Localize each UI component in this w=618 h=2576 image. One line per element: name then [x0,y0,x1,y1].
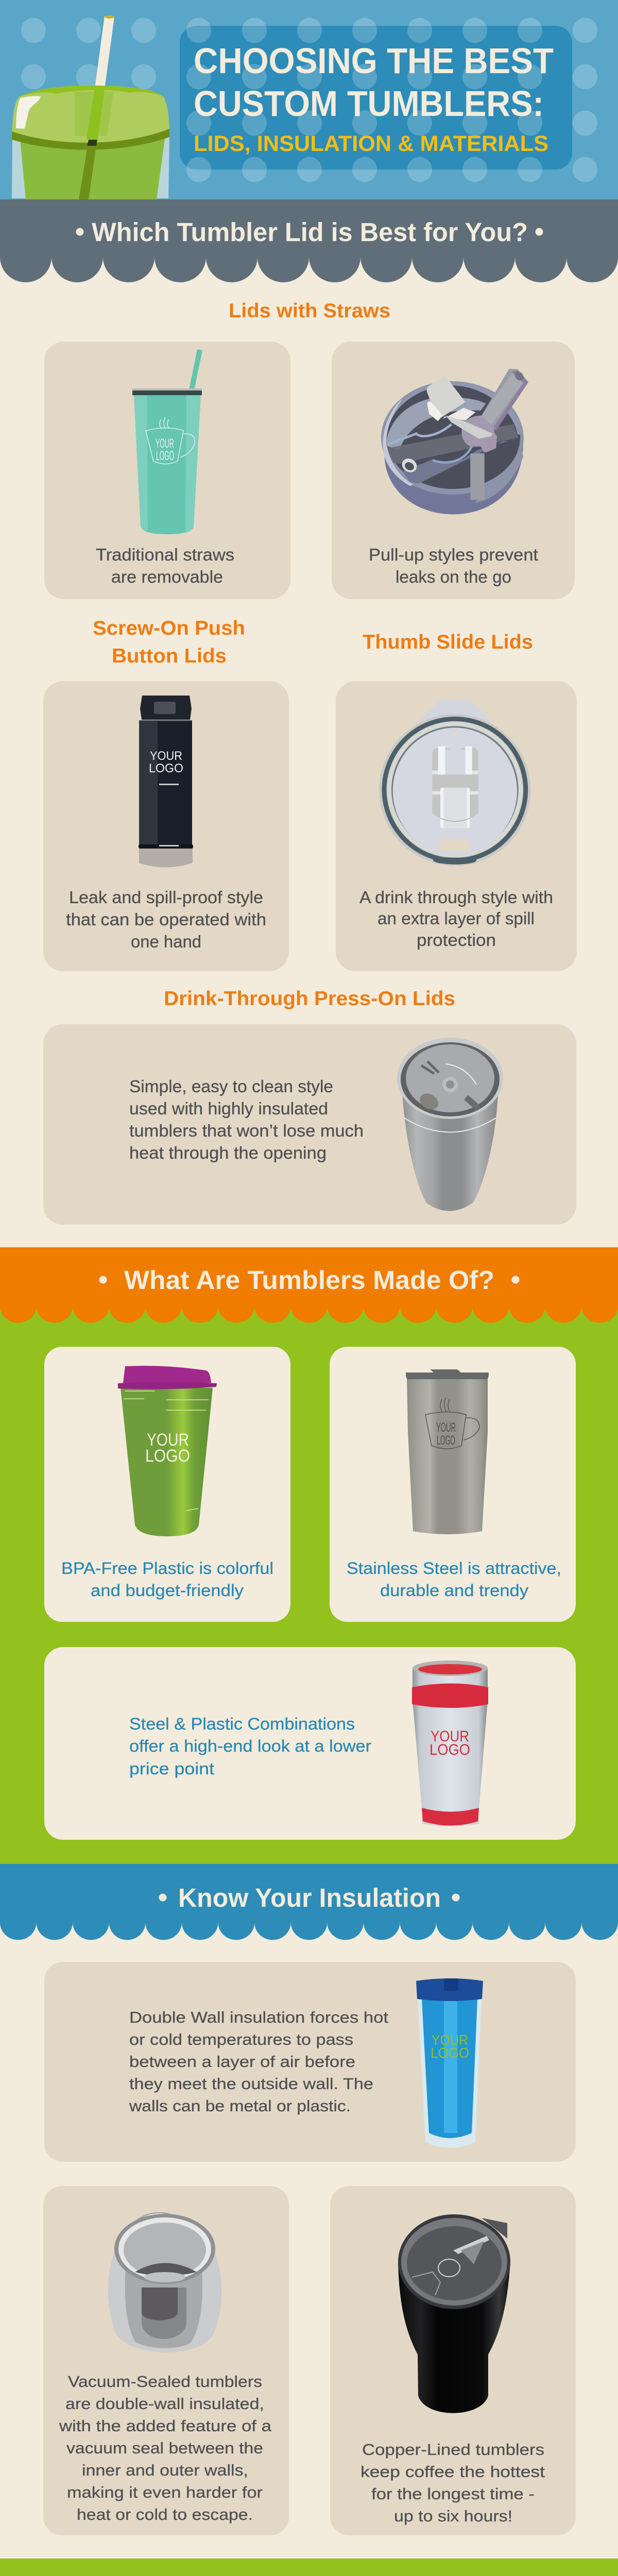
caption: are double-wall insulated, [65,2395,264,2413]
icon: black tumbler: LOGO [149,761,183,775]
caption: inner and outer walls, [82,2461,248,2479]
description: or cold temperatures to pass [129,2030,353,2048]
heading: lids with straws: Lids with Straws [229,300,390,322]
caption [347,1559,561,1600]
icon: blue double-wall tumbler: LOGO [431,2045,469,2061]
caption: keep coffee the hottest [360,2463,545,2481]
description: they meet the outside wall. The [129,2075,373,2093]
section banner: personalize [0,2558,618,2576]
caption: leaks on the go [396,567,511,586]
caption: heat or cold to escape. [77,2505,253,2523]
icon: steel and red travel mug [412,1660,488,1826]
icon: green plastic cup with purple lid [118,1366,217,1536]
section banner: lids [0,199,618,282]
panel: vacuum-sealed [43,2186,289,2535]
caption: for the longest time - [371,2485,535,2503]
caption [369,545,538,586]
caption [59,2372,272,2523]
cream background: insulation [0,1922,618,2561]
description: heat through the opening [129,1143,327,1162]
caption: making it even harder for [67,2483,263,2501]
description [129,1715,371,1778]
caption: Leak and spill-proof style [69,888,263,907]
caption [61,1559,273,1600]
panel: BPA-free plastic [44,1347,290,1622]
caption: Vacuum-Sealed tumblers [68,2372,262,2391]
heading: thumb slide lids: Thumb Slide Lids [363,631,533,653]
icon: thumb slide lid [379,700,531,866]
heading: screw-on push button lids: Screw-On Push [93,617,245,639]
title panel [180,26,572,170]
icon: green cup with straw [12,15,169,199]
caption: protection [417,930,496,950]
panel: copper-lined [330,2186,576,2535]
icon: green plastic cup with purple lid: YOUR [147,1430,189,1450]
icon: stainless steel tumbler: YOUR [436,1420,456,1435]
icon: stainless steel tumbler: LOGO [437,1433,455,1448]
icon: stainless steel tumbler [406,1369,489,1534]
caption: vacuum seal between the [66,2439,263,2457]
heading: screw-on push button lids [93,617,245,667]
heading: drink-through press-on lids: Drink-Through Press-On Lids [164,988,455,1010]
title: CUSTOM TUMBLERS: [194,83,544,124]
panel: screw-on lids [43,681,289,971]
icon: black copper-lined tumbler [398,2214,510,2413]
caption [66,888,266,951]
panel: drink-through press-on lids [43,1024,576,1225]
icon: blue double-wall tumbler [416,1978,483,2148]
icon: teal tumbler with straw: YOUR [156,436,174,451]
title: LIDS, INSULATION & MATERIALS [194,131,548,156]
caption [96,545,234,586]
icon: steel and red travel mug: LOGO [430,1741,470,1758]
icon: black tumbler: YOUR [150,749,182,763]
icon: black tumbler [139,696,193,868]
caption: an extra layer of spill [377,909,535,928]
header banner [0,0,618,200]
icon: silver vacuum tumbler [108,2213,221,2352]
panel: thumb slide lids [336,681,577,971]
section banner: insulation [0,1864,618,1940]
panel: double wall insulation [44,1962,576,2162]
icon: blue double-wall tumbler: YOUR [432,2032,468,2048]
description: tumblers that won’t lose much [129,1121,364,1140]
green background: materials [0,1303,618,1865]
caption: Traditional straws [96,545,234,564]
caption: durable and trendy [380,1581,528,1600]
icon: teal tumbler with straw [132,350,202,534]
heading: screw-on push button lids: Button Lids [112,645,227,667]
caption: with the added feature of a [59,2417,272,2435]
section banner: insulation: Know Your Insulation [178,1883,441,1912]
icon: green plastic cup with purple lid: LOGO [145,1446,190,1466]
description [129,1077,364,1162]
description: Steel & Plastic Combinations [129,1715,355,1733]
description [129,2008,388,2115]
caption: and budget-friendly [91,1581,244,1600]
caption: Pull-up styles prevent [369,545,538,564]
description: used with highly insulated [129,1099,328,1118]
section banner: materials: What Are Tumblers Made Of? [124,1265,494,1295]
caption: Copper-Lined tumblers [362,2441,544,2459]
title: CHOOSING THE BEST [194,41,554,81]
caption: that can be operated with [66,910,266,929]
description: offer a high-end look at a lower [129,1737,371,1755]
description: between a layer of air before [129,2053,355,2071]
caption [360,2441,545,2525]
description: Simple, easy to clean style [129,1077,333,1096]
caption: BPA-Free Plastic is colorful [61,1559,273,1578]
panel: traditional straws [44,342,290,599]
panel: pull-up lids [332,342,575,599]
title [194,41,554,156]
icon: steel and red travel mug: YOUR [431,1728,469,1745]
caption: Stainless Steel is attractive, [347,1559,561,1578]
icon: steel press-on tumbler [397,1038,503,1211]
description: Double Wall insulation forces hot [129,2008,388,2026]
section banner: materials [0,1247,618,1323]
panel: stainless steel [330,1347,576,1622]
section banner: lids: Which Tumbler Lid is Best for You? [92,217,528,247]
caption: A drink through style with [359,888,553,907]
icon: pull-up lid [381,369,528,514]
icon: teal tumbler with straw: LOGO [156,449,174,463]
caption [359,888,553,950]
caption: are removable [111,567,223,586]
description: walls can be metal or plastic. [129,2097,351,2115]
description: price point [129,1759,214,1778]
panel: steel and plastic combinations [44,1647,576,1840]
caption: one hand [131,932,201,951]
caption: up to six hours! [394,2507,512,2525]
